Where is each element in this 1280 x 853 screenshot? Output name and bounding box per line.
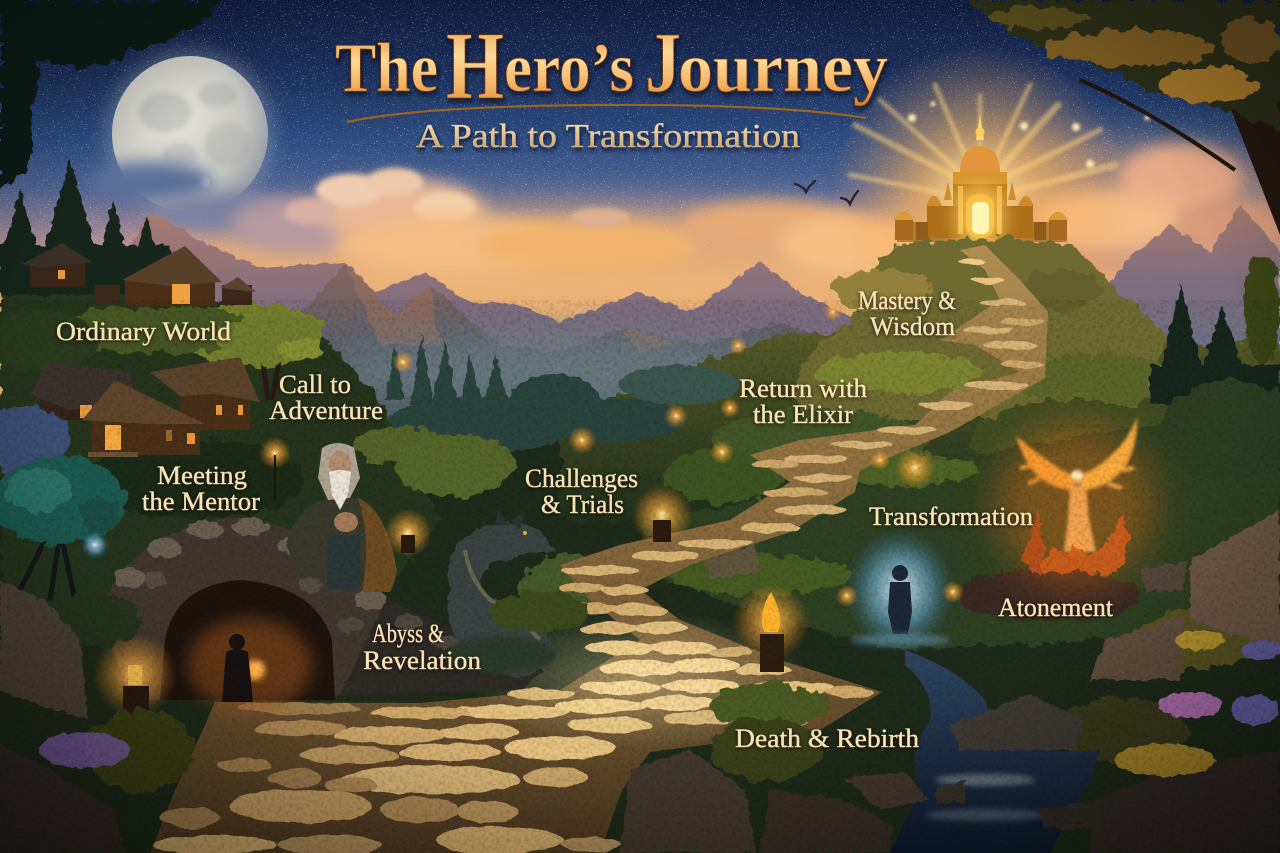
hilltop ground with highlights [710, 238, 1190, 480]
pine trees left [0, 158, 170, 295]
stage labels [56, 286, 1114, 753]
lanterns and glowing lamps [81, 303, 964, 722]
label: Return with the Elixir: the Elixir [753, 400, 853, 429]
house: far cottage [22, 243, 92, 287]
label: Challenges and Trials: Challenges [525, 464, 638, 493]
mid-ground right meadow [520, 380, 1280, 650]
label: Abyss and Revelation: Revelation [363, 646, 481, 675]
title [335, 12, 888, 119]
label: Call to Adventure [269, 370, 383, 425]
label: Transformation: Transformation [869, 502, 1033, 531]
label: Challenges and Trials [525, 464, 638, 519]
house: upper lodge [95, 246, 256, 306]
label: Return with the Elixir: Return with [739, 374, 867, 403]
label: Ordinary World: Ordinary World [56, 317, 231, 346]
icon: fiery phoenix [995, 418, 1155, 585]
title: ero’s [504, 30, 634, 107]
village houses [22, 243, 260, 457]
stream [890, 650, 1100, 853]
foreground grass bushes [40, 592, 1255, 790]
dragon [445, 510, 556, 680]
tree canopy top left [0, 0, 225, 190]
mentor figure [286, 443, 397, 592]
foreground rocks [0, 510, 1280, 853]
mid background hills [0, 245, 1280, 853]
left village hillside [0, 270, 515, 600]
label: Meeting the Mentor: the Mentor [142, 487, 260, 516]
icon: full moon [104, 48, 276, 220]
blue glowing portal [844, 526, 956, 654]
title underline [347, 105, 866, 122]
figure in cave [222, 634, 253, 702]
label: Atonement: Atonement [998, 593, 1114, 622]
label: Mastery and Wisdom: Mastery & [858, 286, 956, 315]
pine trees right [1150, 285, 1280, 405]
label: Meeting the Mentor [142, 461, 260, 516]
label: Death and Rebirth: Death & Rebirth [735, 724, 919, 753]
label: Abyss and Revelation [363, 619, 481, 675]
tree: yellow-green oak [218, 314, 322, 400]
label: Challenges and Trials: & Trials [541, 490, 624, 519]
castle glow and light rays [830, 45, 1150, 345]
valley mist [320, 335, 800, 415]
house: large lodge [150, 357, 260, 430]
label: Mastery and Wisdom: Wisdom [870, 312, 955, 341]
house: dark thatched cottage [30, 362, 135, 420]
label: Call to Adventure: Call to [279, 370, 351, 399]
title: ourney [678, 30, 888, 107]
winding stone path [150, 245, 1048, 853]
subtitle: A Path to Transformation [416, 118, 800, 155]
title: The [335, 30, 438, 107]
icon: birds [795, 181, 858, 204]
label: Return with the Elixir [739, 374, 867, 429]
wall of stone arch and cave [100, 518, 545, 711]
label: Call to Adventure: Adventure [269, 396, 383, 425]
label: Meeting the Mentor: Meeting [157, 461, 247, 490]
tree canopy top right [965, 0, 1280, 365]
tree line in the valley [385, 335, 740, 453]
castle on the hilltop [894, 115, 1068, 250]
flowers [40, 630, 1280, 776]
house: front cottage [82, 380, 205, 457]
label: Abyss and Revelation: Abyss & [372, 619, 444, 648]
clouds [88, 144, 1280, 275]
title: H [446, 12, 504, 119]
cave opening [160, 580, 335, 711]
title: J [645, 14, 681, 110]
label: Mastery and Wisdom [858, 286, 956, 341]
tree: blue-green left [0, 405, 128, 600]
distant mountains [120, 205, 1280, 440]
